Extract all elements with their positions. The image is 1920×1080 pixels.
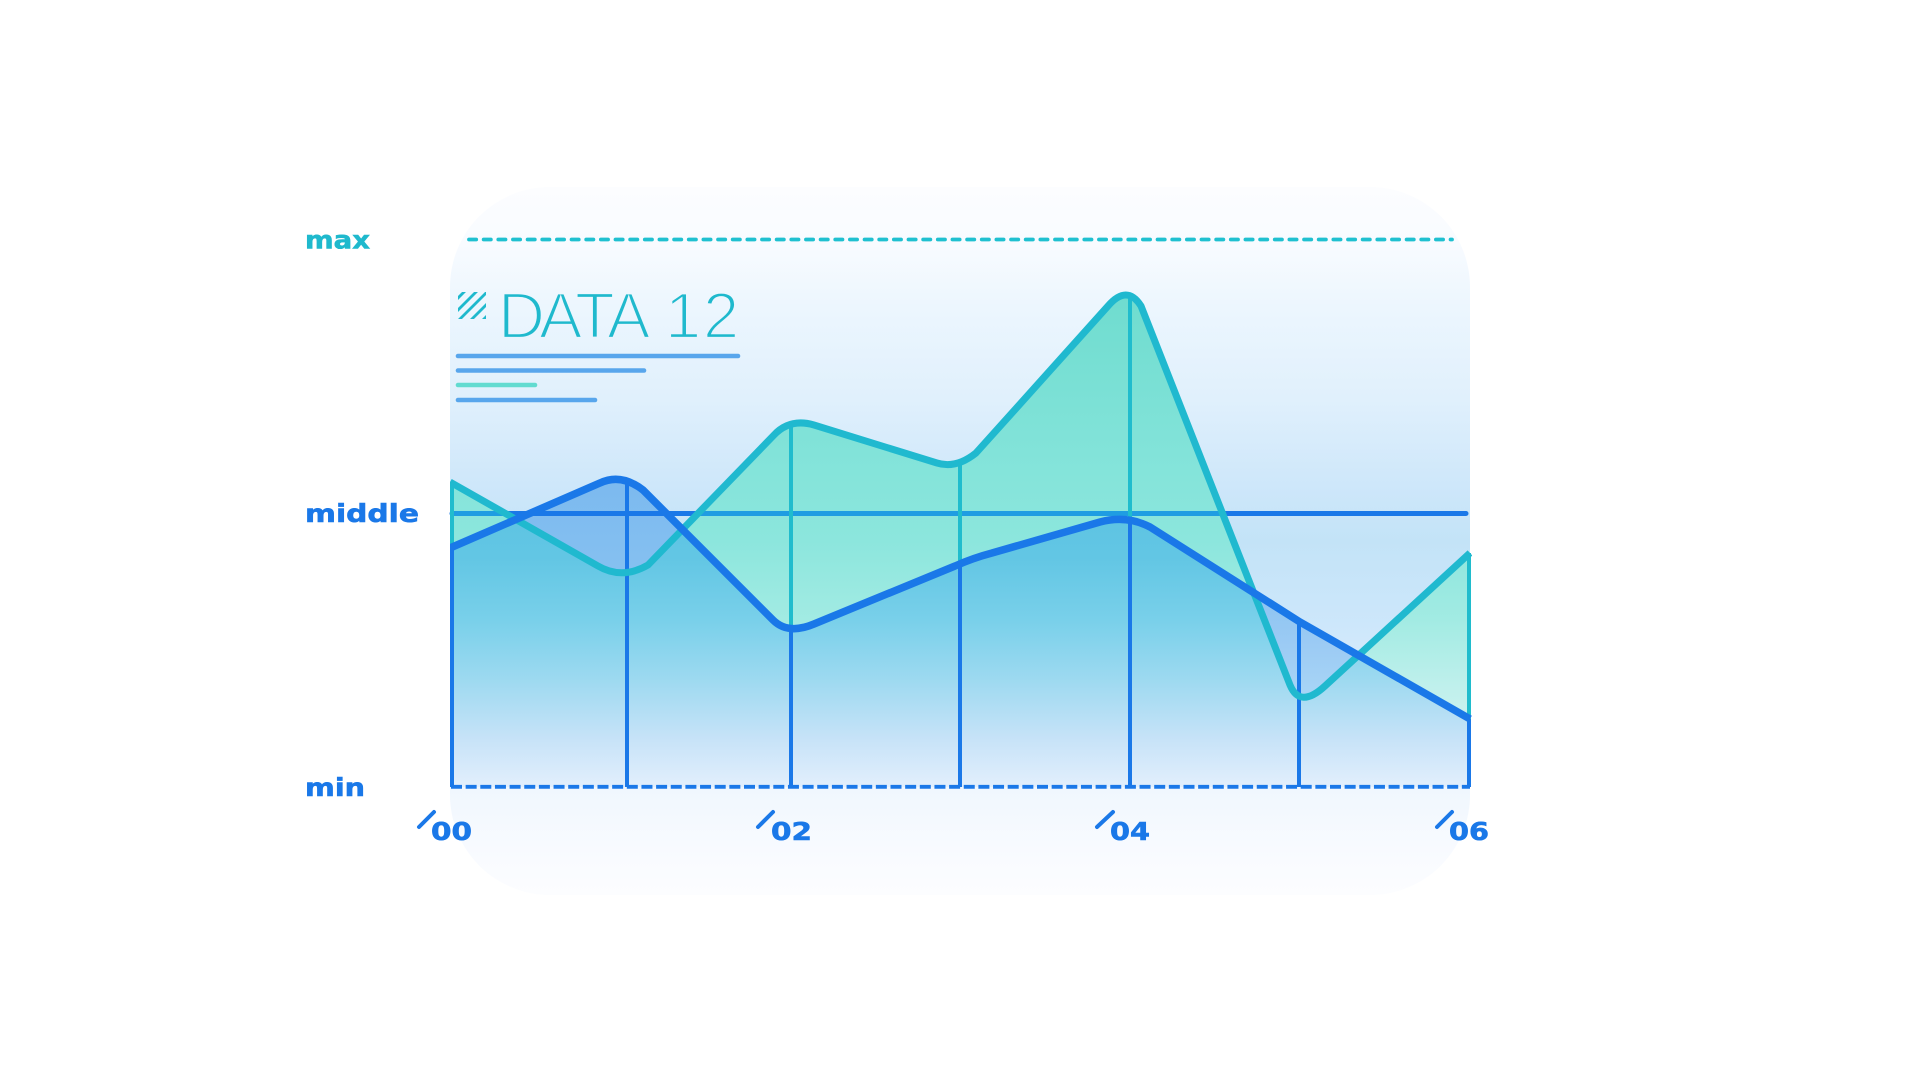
line: blue series [450,479,1470,719]
legend bars [458,356,738,400]
title: DATA 12 [498,279,739,352]
title icon: hatch square [458,292,486,319]
middle reference line [452,511,1466,516]
area chart [450,295,1470,787]
x axis label 04: 04 [1110,817,1150,846]
min label: min [305,773,365,802]
x axis label 06 [1437,812,1489,846]
min dashed line [451,785,1470,789]
x axis label 00 [419,812,472,846]
middle line over blue [534,511,664,516]
x axis label 04 [1097,812,1150,846]
area: teal series [454,298,1467,713]
middle line seen through teal [454,511,1220,516]
x axis label 02 [758,812,812,846]
x axis label 06: 06 [1449,817,1489,846]
panel: chart background [450,187,1470,895]
teal drop lines [452,296,1469,719]
x axis label 00: 00 [431,817,472,846]
x axis label 02: 02 [771,817,812,846]
max dashed line [469,238,1452,241]
line: teal series [450,295,1470,697]
max label: max [305,226,370,254]
area: blue series [524,483,1352,694]
area: overlap of series [454,523,1387,677]
blue drop lines [452,478,1469,787]
middle label: middle [305,499,419,528]
